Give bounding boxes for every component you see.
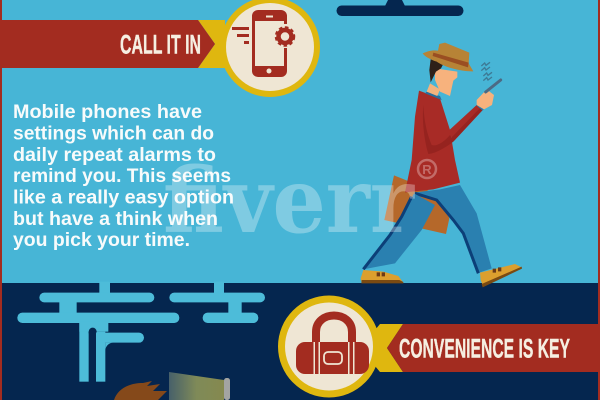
- figure: bottom hair: [114, 381, 167, 400]
- banner: sign panel: [169, 372, 230, 400]
- vibration marks: [481, 62, 492, 81]
- collar: [425, 92, 442, 100]
- satchel: [384, 175, 449, 234]
- body text: you pick your time.: [13, 230, 190, 251]
- top navy pipe: [336, 0, 464, 16]
- light blue pipes: [17, 282, 265, 382]
- hat: [423, 43, 473, 71]
- arm: [448, 105, 483, 142]
- body text: but have a think when: [13, 209, 218, 230]
- icon: phone with gear: [220, 0, 320, 97]
- body text: daily repeat alarms to: [13, 145, 216, 166]
- watermark: fiverr: R: [422, 162, 432, 177]
- shoes: [361, 270, 403, 283]
- icon: duffel bag: [278, 296, 380, 398]
- banner: convenience is key: [360, 324, 598, 372]
- phone: [486, 80, 501, 92]
- body text: remind you. This seems: [13, 166, 231, 187]
- body text: Mobile phones have: [13, 102, 202, 123]
- banner: call it in: [0, 20, 225, 68]
- body text: settings which can do: [13, 124, 214, 144]
- figure: man walking with phone: [361, 43, 522, 287]
- hand: [477, 89, 494, 109]
- banner: call it in: CALL IT IN: [120, 30, 201, 60]
- face: [435, 68, 457, 96]
- jacket: [405, 91, 460, 192]
- watermark: fiverr: fiverr: [163, 148, 415, 254]
- body text: [13, 102, 234, 251]
- neck: [427, 83, 440, 96]
- body text: like a really easy option: [13, 188, 234, 208]
- ground: navy lower section: [0, 283, 600, 400]
- back leg: [413, 185, 492, 273]
- hair: [429, 59, 444, 82]
- front leg: [363, 193, 435, 269]
